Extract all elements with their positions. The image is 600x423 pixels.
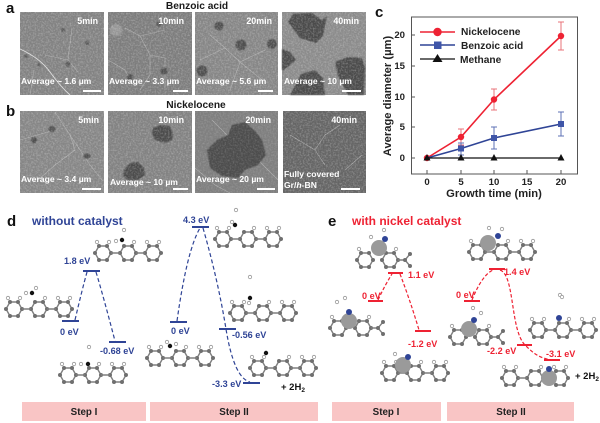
- y axis labels: 15: [394, 61, 406, 72]
- panel b: nickelocene micrographs: [6, 100, 366, 193]
- micrograph a 20min: Average ~ 5.6 µm: [196, 76, 267, 86]
- y axis labels: 0: [400, 153, 405, 164]
- micrograph b 10min: [108, 111, 192, 193]
- molecule d step II transition: [213, 208, 283, 248]
- energy profile e step II: [456, 267, 599, 383]
- x axis labels: [424, 177, 566, 188]
- energy profile e step I: 0 eV: [362, 291, 381, 301]
- plot frame and ticks: [411, 17, 578, 174]
- micrograph a 5min: [20, 12, 104, 95]
- energy profile d step II: + 2H: [281, 382, 301, 393]
- x axis labels: 10: [489, 177, 499, 188]
- y axis labels: [394, 30, 406, 164]
- micrograph b 5min: Average ~ 3.4 µm: [21, 174, 92, 184]
- micrograph a 20min: [195, 12, 278, 95]
- micrograph b 40min: [283, 111, 366, 193]
- molecule d step I final: [58, 345, 128, 384]
- micrograph a 10min: Average ~ 3.3 µm: [109, 76, 180, 86]
- x axis labels: 5: [458, 177, 464, 188]
- step II bar d: Step II: [219, 407, 249, 418]
- legend: Benzoic acid: [461, 41, 523, 52]
- panel letter a: a: [6, 0, 15, 17]
- micrograph a 20min: 20min: [246, 16, 272, 26]
- energy profile d step I: [60, 256, 134, 356]
- energy profile d step I: -0.68 eV: [100, 346, 134, 356]
- energy profile e step II: -3.1 eV: [546, 349, 575, 359]
- energy profile d step II: -0.56 eV: [232, 330, 266, 340]
- micrograph b 40min: Fully covered: [284, 169, 339, 179]
- y axis labels: 20: [394, 30, 405, 41]
- panel e: pathway with nickel catalyst: [328, 213, 599, 421]
- energy profile d step II: 4.3 eV: [183, 215, 209, 225]
- series: nickelocene: [424, 22, 564, 161]
- micrograph a 5min: 5min: [77, 16, 98, 26]
- energy profile e step II: + 2H: [575, 371, 595, 382]
- panel d: pathway without catalyst: [4, 208, 318, 421]
- micrograph a 40min: [282, 12, 366, 95]
- step II bar e: [447, 402, 574, 421]
- micrograph b 5min: [20, 111, 104, 193]
- panel letter b: b: [6, 103, 15, 120]
- y axis labels: 5: [400, 122, 406, 133]
- y axis title: Average diameter (µm): [382, 36, 394, 156]
- panel letter c: c: [375, 4, 383, 21]
- micrograph a 40min: Average ~ 10 µm: [284, 76, 352, 86]
- heading: Benzoic acid: Benzoic acid: [166, 1, 228, 12]
- energy profile d step II: [170, 215, 305, 394]
- y axis labels: 10: [394, 92, 405, 103]
- energy profile e step II: -2.2 eV: [487, 346, 516, 356]
- micrograph a 40min: 40min: [333, 16, 359, 26]
- micrograph b 20min: [195, 111, 278, 193]
- step I bar d: [22, 402, 146, 421]
- energy profile e step II: 2: [595, 376, 599, 383]
- panel letter e: e: [328, 213, 336, 230]
- panel a: benzoic acid micrographs: [6, 0, 366, 95]
- micrograph b 40min: Gr/h-BN: [284, 180, 317, 190]
- molecule e step II initial: [448, 306, 505, 346]
- x axis labels: 0: [424, 177, 430, 188]
- panel letter d: d: [7, 213, 16, 230]
- step I bar e: [332, 402, 441, 421]
- micrograph a 10min: [108, 12, 192, 95]
- energy profile d step I: 0 eV: [60, 327, 79, 337]
- energy profile d step II: 0 eV: [171, 326, 190, 336]
- molecule d step II intermediate: [228, 275, 298, 322]
- molecule e step II intermediate: [528, 293, 598, 339]
- series: benzoic acid: [427, 112, 564, 158]
- molecule e step I final: [380, 352, 450, 382]
- legend: [420, 27, 523, 66]
- step I bar e: Step I: [373, 407, 400, 418]
- legend: Nickelocene: [461, 27, 521, 38]
- step II bar d: [150, 402, 318, 421]
- micrograph b 40min: 40min: [331, 115, 357, 125]
- molecule d step I transition: [93, 228, 163, 262]
- heading: with nickel catalyst: with nickel catalyst: [351, 214, 461, 228]
- energy profile e step I: -1.2 eV: [408, 339, 437, 349]
- micrograph b 20min: 20min: [245, 115, 271, 125]
- molecule e step II transition: [467, 226, 537, 261]
- micrograph a 10min: 10min: [158, 16, 184, 26]
- panel c: line chart of average diameter vs growth time: [375, 4, 578, 200]
- molecule e step II final: [500, 365, 570, 387]
- micrograph a 5min: Average ~ 1.6 µm: [21, 76, 92, 86]
- energy profile e step II: 0 eV: [456, 290, 475, 300]
- x axis labels: 15: [522, 177, 533, 188]
- x axis title: Growth time (min): [446, 188, 542, 200]
- molecule d step I initial: [4, 286, 74, 318]
- molecule d step II initial: [145, 340, 215, 367]
- energy profile d step II: 2: [301, 387, 305, 394]
- series: methane: [424, 154, 564, 160]
- step I bar d: Step I: [71, 407, 98, 418]
- energy profile d step I: 1.8 eV: [64, 256, 90, 266]
- legend: Methane: [460, 55, 502, 66]
- energy profile e step I: 1.1 eV: [408, 270, 434, 280]
- energy profile e step I: [362, 270, 437, 349]
- micrograph b 5min: 5min: [78, 115, 99, 125]
- micrograph b 10min: 10min: [158, 115, 184, 125]
- micrograph b 10min: Average ~ 10 µm: [110, 177, 178, 187]
- molecule e step I transition: [355, 228, 412, 269]
- molecule e step I initial: [328, 296, 385, 337]
- x axis labels: 20: [556, 177, 566, 188]
- energy profile d step II: -3.3 eV: [212, 379, 241, 389]
- step II bar e: Step II: [496, 407, 526, 418]
- micrograph b 20min: Average ~ 20 µm: [196, 174, 264, 184]
- energy profile e step II: 1.4 eV: [504, 267, 530, 277]
- molecule d step II final: [248, 351, 318, 377]
- heading: without catalyst: without catalyst: [31, 214, 123, 228]
- heading: Nickelocene: Nickelocene: [166, 100, 226, 111]
